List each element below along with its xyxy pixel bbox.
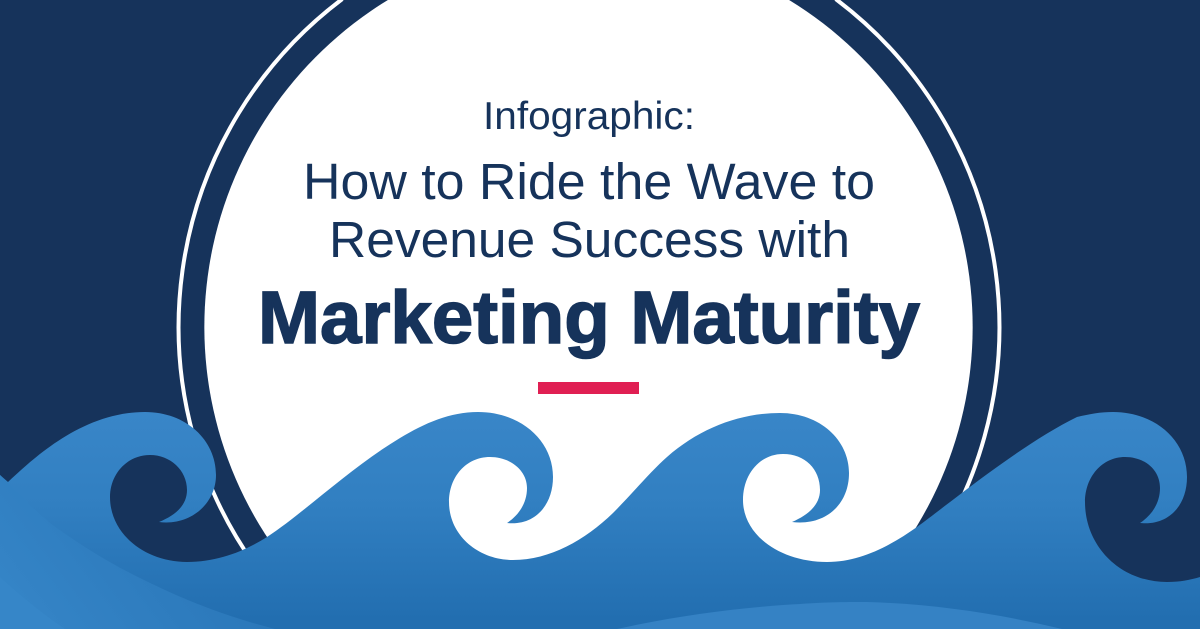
left foreground swell bbox=[0, 475, 275, 629]
red accent bar bbox=[538, 382, 639, 394]
waves bbox=[0, 412, 1200, 629]
outer white ring bbox=[179, 0, 999, 575]
heading: Revenue Success with: Revenue Success with bbox=[329, 211, 850, 268]
heading: Infographic: Infographic: bbox=[483, 95, 695, 138]
main wave with curls bbox=[0, 412, 1200, 629]
white circle bbox=[204, 0, 973, 575]
lower left highlight bbox=[0, 577, 65, 629]
heading: How to Ride the Wave to: How to Ride the Wave to bbox=[303, 153, 875, 210]
heading: Marketing Maturity: Marketing Maturity bbox=[258, 276, 920, 359]
bottom highlight swell bbox=[617, 602, 1062, 629]
